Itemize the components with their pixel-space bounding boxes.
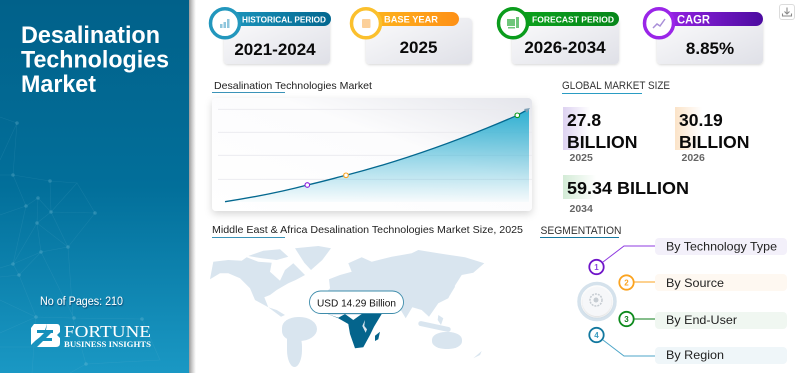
segment: region: 4: [594, 331, 599, 340]
stat: 2026: 2026: [682, 152, 705, 164]
stat: 2034: [563, 175, 689, 215]
segment: source: By Source: [666, 276, 724, 290]
icon: growth chart: [653, 19, 665, 28]
segment: end-user: [619, 312, 787, 329]
icon: download: [780, 4, 794, 20]
lake detail: [362, 320, 367, 333]
logo: [31, 322, 151, 349]
Japan: [447, 283, 455, 295]
badge: forecast period: 2026-2034: [524, 38, 606, 57]
stat: 2025: [563, 107, 638, 164]
icon: bars: [220, 19, 230, 28]
badge: CAGR: 8.85%: [686, 39, 734, 58]
heading: regional market: Middle East & Africa Desalination Technologies Market Size, 2025: [212, 224, 523, 236]
title: Technologies: [21, 46, 169, 74]
segment: technology type: By Technology Type: [666, 240, 777, 254]
segment: region: [589, 328, 787, 364]
title: [21, 22, 169, 98]
Arctic islands: [248, 249, 288, 260]
stat: 2025: 27.8: [567, 110, 601, 130]
badge: forecast period: [498, 9, 619, 64]
badge: CAGR: CAGR: [677, 14, 711, 26]
logo: BUSINESS INSIGHTS: [64, 340, 151, 349]
map: Southeast Asia: [418, 321, 451, 332]
stat: 2025: BILLION: [567, 132, 638, 152]
heading: segmentation: SEGMENTATION: [540, 225, 622, 237]
title: Desalination: [21, 22, 160, 49]
stat: 2026: BILLION: [679, 132, 750, 152]
badge: historical period: [210, 9, 331, 64]
segment: end-user: By End-User: [666, 313, 737, 327]
segment: source: 2: [624, 278, 629, 288]
Greenland: [295, 246, 331, 270]
segment: region: By Region: [666, 348, 724, 362]
badge: CAGR: [644, 9, 763, 64]
marker: 2034: [515, 113, 520, 118]
marker: 2026: [344, 173, 348, 178]
icon: forecast chart: [507, 17, 519, 28]
segment: technology type: [589, 238, 787, 274]
badge: base year: [352, 9, 472, 64]
heading: market chart: Desalination Technologies Market: [214, 80, 372, 92]
North America: [210, 257, 305, 317]
segmentation diagram: [579, 238, 787, 364]
icon: calendar: [362, 19, 370, 28]
New Zealand: [473, 351, 482, 358]
badge: base year: 2025: [400, 38, 437, 57]
badge: forecast period: FORECAST PERIOD: [532, 14, 614, 24]
badge: base year: BASE YEAR: [384, 14, 439, 24]
stat: 2034: 2034: [570, 203, 593, 215]
page count: No of Pages: 210: [40, 296, 123, 308]
segment: end-user: 3: [624, 315, 629, 324]
segment: technology type: 1: [594, 263, 599, 272]
callout: [310, 291, 404, 314]
segment: source: [619, 274, 787, 291]
Madagascar: [375, 332, 380, 341]
panel: sidebar: [0, 0, 196, 373]
region: Middle East and Africa: [328, 314, 382, 348]
title: Market: [21, 71, 96, 98]
logo: FORTUNE: [64, 322, 151, 341]
hub icon: [579, 284, 615, 320]
badge: historical period: HISTORICAL PERIOD: [242, 14, 326, 24]
stat: 2034: 59.34 BILLION: [567, 178, 689, 198]
stat: 2025: 2025: [570, 152, 593, 164]
world map: [210, 246, 484, 358]
heading: global market size: GLOBAL MARKET SIZE: [562, 80, 670, 92]
marker: 2025: [305, 183, 310, 187]
map: Australia: [432, 332, 462, 349]
Philippines: [438, 315, 443, 325]
stat: 2026: 30.19: [679, 110, 723, 130]
badge: historical period: 2021-2024: [234, 40, 316, 59]
callout: USD 14.29 Billion: [317, 298, 396, 310]
map: South America: [282, 317, 317, 367]
Eurasia: [322, 250, 484, 318]
area chart: [212, 98, 532, 211]
stat: 2026: [675, 107, 750, 164]
